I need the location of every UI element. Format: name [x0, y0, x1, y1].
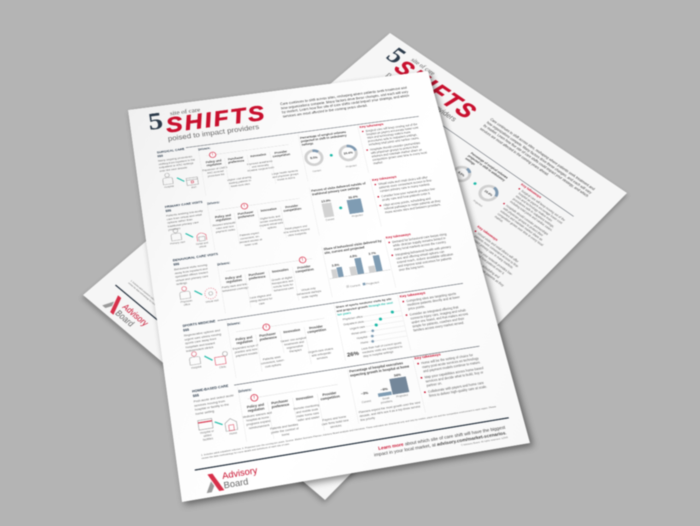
drivers: Virtual-only behavioral startups scale rapidly [297, 287, 321, 299]
icon: patient to clinic: Clinic [219, 365, 226, 369]
back sheet top rule [390, 89, 574, 217]
drivers: Innovation [260, 207, 277, 212]
icon: clinic to retail [170, 228, 208, 248]
back sheet data: surgical: 19.4% [449, 176, 458, 183]
heading: behavioral care: BEHAVIORAL CARE VISITS [173, 252, 218, 262]
takeaways: Align access points, scheduling and referral pathways to retain patients as they move across sites and between providers. [383, 197, 441, 214]
icon: provider to virtual: Physician office [180, 299, 193, 307]
icon: facility to home: Hospital or skilled facilities [200, 430, 214, 442]
icon: patient to clinic: Hospital [191, 365, 202, 370]
drivers: Growth of digital therapeutics and remote tools for behavioral care [271, 276, 294, 292]
chart: dot plot: Hospital [356, 335, 368, 340]
icon: hospital to ASC [162, 172, 200, 189]
drivers: Policy and regulation [215, 213, 232, 222]
icon: clinic to retail: Primary care [170, 241, 185, 245]
back sheet footer: 1. Includes adult outpatient volumes. 2. Projected over the coming ten years. Source: Market Scenario Planner; Advisory Board analysis and interviews. These estimates are directional only and vary by market, payer mix and the competitive environment in each region. Please review the data methodology for more details. [127, 280, 340, 454]
drivers: Parity laws and tele-behavioral coverage [222, 282, 249, 293]
takeaways: Map your capabilities across home-based services and decide what to build, buy or partner on. [424, 366, 484, 388]
takeaways: Competing sites are targeting sports medicine patients directly and at lower price points. [406, 292, 460, 311]
panel: behavioral care visits [172, 232, 454, 307]
heading: behavioral care: $$$ [173, 262, 179, 266]
panel: primary care visits [164, 175, 441, 248]
drivers: Purchaser preference [237, 210, 255, 219]
chart: dot plot: Retail clinic [351, 330, 366, 336]
chart: hospital-at-home bars: Small providers [381, 397, 393, 404]
takeaways [414, 352, 488, 398]
chart: donuts: Projected [346, 164, 357, 168]
chart: donuts: Percentage of surgical volumes projected to shift to ambulatory settings [300, 130, 347, 146]
back sheet takeaways: Consider how your network provides low-acuity care and how patients enter it. [464, 242, 513, 276]
back sheet takeaways: Key takeaways [476, 225, 499, 242]
takeaways: Demand for behavioral care keeps rising while clinician supply remains limited in many local markets across the country. [392, 233, 447, 251]
chart: hospital-at-home bars: Percentage of hospital executives expecting growth in hospital at home [349, 361, 410, 377]
drivers: Less stigma and rising demand for care [250, 293, 273, 305]
heading: primary care [164, 200, 203, 213]
drivers [226, 318, 334, 369]
heading: primary care: PRIMARY CARE VISITS [165, 200, 203, 209]
chart: grouped bars: 3.7% [368, 251, 376, 256]
chart: bars: Projected [352, 214, 363, 218]
heading: sports medicine: $$$ [183, 328, 189, 332]
back sheet footer: Advisory [120, 302, 151, 328]
takeaways: Key takeaways [359, 122, 384, 129]
takeaways: Virtual visits and retail clinics will offer patients more convenient access to first-contact primary care in many markets. [378, 176, 432, 193]
drivers: Improved anesthesia and minimally invasive surgical tools [247, 160, 274, 172]
numeral five: 5 [146, 107, 165, 136]
drivers: Provider competition [272, 150, 290, 158]
back sheet title: 5 [380, 43, 412, 68]
chart: hospital-at-home bars: Current [361, 400, 371, 404]
drivers: Retail players and new entrants expand clinic footprints [283, 224, 310, 237]
drivers: ! [212, 153, 214, 157]
drivers: Digital tools and remote monitoring expand virtual care options [259, 215, 284, 230]
takeaways: Key takeaways [385, 232, 411, 240]
chart legend: Current Projected [350, 281, 379, 288]
logo: Advisory Board [206, 465, 258, 494]
takeaways: Key takeaways [414, 352, 441, 361]
drivers: Relaxed telehealth rules and new payment codes [212, 221, 236, 234]
drivers: Drivers: [238, 387, 252, 393]
drivers: ! [243, 204, 245, 208]
drivers: Purchaser preference [228, 156, 244, 164]
drivers: Policy and regulation [235, 335, 253, 345]
heading: surgical care: SURGICAL CARE [157, 147, 185, 154]
drivers: Purchaser preference [248, 271, 266, 281]
takeaways: Key takeaways [399, 291, 426, 299]
chart: grouped bars [323, 239, 390, 288]
panel: surgical care [156, 122, 428, 189]
SHIFTS wordmark: SHIFTS [164, 101, 268, 137]
drivers: ! [253, 396, 255, 400]
chart: bars: 25.0% [348, 195, 358, 199]
drivers: Drivers: [217, 261, 230, 266]
back sheet title: SHIFTS [389, 56, 483, 124]
drivers: Patients seek convenient, lower-cost options [260, 355, 285, 369]
chart: grouped bars: 2.8% [331, 263, 340, 267]
takeaways: Surgical care will keep moving out of the hospital as payers encourage lower-cost sites and technology makes more procedures safe in outpatient settings, including total joints and cardiac cases. [365, 123, 420, 146]
drivers: Urgent-care chains add orthopedic services [308, 347, 333, 360]
back sheet data: surgical: Projected [472, 200, 483, 207]
takeaways: Collaborate with payers and home care firms to deliver high-quality care at scale. [428, 381, 488, 398]
chart: dot plot: Less than half of current sports medicine visits are expected to stay in hospital settings [361, 341, 403, 358]
chart: donuts: 8.5% [306, 153, 314, 158]
logo: Advisory Board: Board [223, 476, 249, 491]
back sheet footer: Board [113, 308, 137, 328]
drivers: Drivers: [207, 200, 220, 205]
drivers: Innovation [283, 328, 301, 334]
back sheet data: surgical [446, 152, 509, 207]
back sheet data: surgical: Current [446, 181, 455, 187]
drivers [206, 198, 310, 247]
rule: sports medicine [217, 283, 463, 321]
drivers: Patients expect convenient, on-demand access at lower cost [239, 231, 262, 247]
takeaways [358, 122, 428, 165]
heading: sports medicine [182, 319, 216, 332]
drivers: Innovation [272, 268, 289, 273]
description: Patients seeking low-acuity care from virtual and retail options rather than traditional primary care practices [166, 209, 203, 231]
chart: dot plot: Urgent care [350, 325, 365, 331]
back sheet takeaways: Key takeaways [430, 269, 453, 287]
drivers: Innovation [250, 153, 266, 158]
chart: hospital-at-home bars [348, 361, 421, 422]
chart: bars: 13.9% [321, 199, 331, 203]
drivers: Purchaser preference [259, 332, 277, 341]
chart: dot plot: Physician office [342, 315, 363, 321]
back sheet takeaways: Virtual visits and retail clinics will offer patients more convenient access to first-contact primary care in many markets. [471, 232, 519, 269]
icon: provider to virtual [179, 286, 219, 307]
drivers: Purchaser preference [271, 399, 289, 409]
drivers: Provider competition [320, 391, 340, 401]
takeaways: Integrating behavioral health with primary care and offering virtual options can extend reach, reduce avoidable utilization and improve total outcomes for patients over the long term. [395, 245, 454, 272]
back sheet title: poised to impact providers [385, 71, 458, 123]
drivers: ! [302, 258, 304, 262]
icon: facility to home [196, 418, 238, 442]
background sheet [83, 33, 627, 500]
front sheet [128, 71, 530, 502]
heading: surgical care: $$$ [157, 154, 163, 158]
takeaways [399, 291, 468, 332]
drivers: Medicare waivers and hospital-at-home programs expand reimbursement [242, 411, 272, 430]
chart: grouped bars: 4.8% [349, 254, 357, 258]
back sheet data: surgical: Percentage of surgical volumes projected to shift to ambulatory settings [464, 152, 509, 182]
drivers [198, 144, 299, 188]
back sheet data: surgical: 8.5% [457, 170, 466, 177]
takeaways [371, 175, 441, 214]
back sheet takeaways: Align access points, scheduling and referral pathways to retain patients as they move across sites. [453, 249, 505, 287]
rule: home-based care [234, 346, 480, 385]
back sheet takeaways: Surgical care will keep moving out of the hospital as payers encourage lower-cost sites and technology makes more procedures safe in outpatient settings, including total joints and cardiac cases. [509, 189, 566, 232]
heading: home-based care: HOME-BASED CARE [192, 384, 229, 393]
chart: dot plot: 26% [346, 350, 359, 358]
footnote: 1. Includes adult outpatient volumes. 2. Projected over the coming ten years. Source: Market Scenario Planner; Advisory Board analysis and interviews. These estimates are directional only and vary by market, payer mix and the competitive environment in each region. Please review the data methodology for more details and definitions of each site of care. [201, 406, 496, 460]
drivers: Patients and families prefer the comfort of home [270, 422, 299, 437]
drivers: Policy and regulation [247, 402, 265, 413]
chart: hospital-at-home bars: Projected [396, 394, 408, 398]
icon: provider to virtual: Virtual visit [205, 299, 219, 304]
chart: dot plot [335, 297, 403, 358]
call to action: impact in your local market, at advisory.com/market-scenarios. [374, 431, 507, 458]
takeaways: Hospitals should consider partnerships with physician groups to protect their volumes and maintain market share as competition grows over time in every local market. [370, 142, 427, 165]
heading: primary care: $$$ [165, 209, 171, 213]
chart: dot plot: Outpatient clinic [343, 320, 364, 326]
drivers: Drivers: [227, 321, 241, 327]
panel: sports medicine [182, 291, 468, 370]
drivers: Expansion of CMS's ASC-covered procedure list [202, 166, 227, 178]
back sheet intro: Care continues to shift across sites, reshaping where patients seek treatment and how organizations compete. Many factors drive these changes, and each will vary by market. Learn how five site of care shifts could impact your strategy, and which services are most affected in the coming years ahead. [479, 118, 595, 198]
description: Many ongoing procedures shifting from inpatient to the outpatient or ASC settings over the next decade [158, 155, 195, 172]
drivers: Large health systems and physician groups invest in ASCs [271, 169, 299, 181]
takeaways [385, 232, 454, 272]
call to action: Learn more about which site of care shift will have the biggest [378, 425, 506, 451]
drivers: Expanded scope of practice and new payment models [232, 343, 258, 358]
intro text: Care continues to shift across sites, reshaping where patients seek treatment and how organizations compete. Many factors drive these changes, and each will vary by market. Learn how five site of care shifts could impact your strategy, and which services are most affected in the coming years ahead. [280, 86, 410, 118]
description: Behavioral visits moving away from inpatient and specialist offices toward virtual and primary care settings [174, 263, 208, 286]
logo: Advisory Board: Advisory [221, 465, 258, 481]
drivers: Policy and regulation [225, 274, 242, 284]
heading: behavioral care [172, 252, 218, 266]
drivers [216, 256, 322, 305]
rule: top [186, 116, 419, 148]
back sheet title: site of care [409, 57, 437, 76]
drivers: Higher cost-sharing leading patients to lower-cost sites [227, 175, 251, 188]
icon: hospital to ASC: ASC [191, 186, 197, 189]
back sheet takeaways [427, 182, 566, 312]
drivers: Remote monitoring and mobile tools make home care safer and easier [293, 403, 320, 422]
chart: donuts: 19.4% [340, 149, 350, 154]
title block [146, 101, 268, 143]
chart: hospital-at-home bars: Planners expect the most growth over the next decade, and 46% see it as a top-three service line priority [358, 401, 421, 422]
panel: home-based care [192, 352, 488, 442]
icon: clinic to retail: Retail and virtual [196, 242, 208, 248]
heading: sports medicine: SPORTS MEDICINE [182, 319, 216, 328]
drivers: Payers and home care firms build new services [321, 415, 349, 429]
drivers: Innovation [296, 395, 314, 401]
footer rule [195, 417, 509, 471]
back sheet takeaways: Demand for behavioral care keeps rising while clinician supply remains limited. [427, 276, 477, 312]
icon: facility to home: Home [229, 432, 237, 436]
takeaways: Consider an integrated offering that connects injury care, imaging and rehab under one brand, and that makes access simple for patients, coaches and their families across every market served. [409, 306, 468, 332]
call to action: © Advisory Board. All rights reserved. 12345 [461, 437, 508, 447]
back sheet takeaways: Hospitals should consider partnerships with physician groups to protect their volumes and maintain market share as competition grows over time in every local market. [494, 204, 549, 247]
icon: patient to clinic [188, 350, 228, 370]
chart: donuts: Current [312, 169, 321, 173]
drivers [238, 384, 349, 437]
chart: bars: Percent of visits delivered outside of traditional primary care settings [311, 182, 366, 196]
drivers: Provider competition [307, 324, 326, 334]
description: Post-acute and select acute services moving from hospital or facility to the home setting [193, 393, 234, 416]
drivers: Newer non-surgical treatments and regenerative therapies [280, 336, 306, 353]
subtitle: poised to impact providers [167, 123, 260, 143]
drivers: Policy and regulation [205, 159, 222, 167]
site of care: site of care [169, 107, 201, 117]
chart: hospital-at-home bars: ~3% [361, 391, 369, 396]
chart: bars [310, 182, 366, 222]
takeaways: Consider how your network provides low-acuity care and how patients enter it. [381, 187, 436, 202]
description: Regenerative options and urgent care clinics moving sports care away from hospitals and toward independent clinics [184, 329, 221, 353]
chart: bars: Current [325, 218, 335, 222]
chart: hospital-at-home bars: ~9% [380, 387, 388, 392]
drivers: Drivers: [198, 146, 211, 151]
drivers: Provider competition [283, 204, 302, 213]
takeaways: Key takeaways [372, 175, 397, 182]
drivers: Provider competition [295, 264, 314, 274]
takeaways: Home will be the setting of choice for many post-acute services as technology and payment models continue to mature. [421, 353, 481, 373]
icon: hospital to ASC: Hospital [164, 185, 174, 189]
chart: dot plot: Home [360, 340, 369, 345]
chart: dot plot: Share of sports medicine visits by site and projected growth through the next ten years [335, 297, 393, 316]
heading: home-based care: $$$ [193, 393, 199, 398]
heading: home-based care [192, 384, 229, 398]
drivers: ! [265, 325, 267, 329]
chart: donuts [300, 130, 358, 173]
chart: hospital-at-home bars: 34% [393, 373, 401, 378]
heading: surgical care [156, 147, 185, 158]
back sheet takeaways: Key takeaways [520, 183, 542, 199]
chart: grouped bars: Share of behavioral visits delivered by site, current and projected [323, 239, 382, 255]
